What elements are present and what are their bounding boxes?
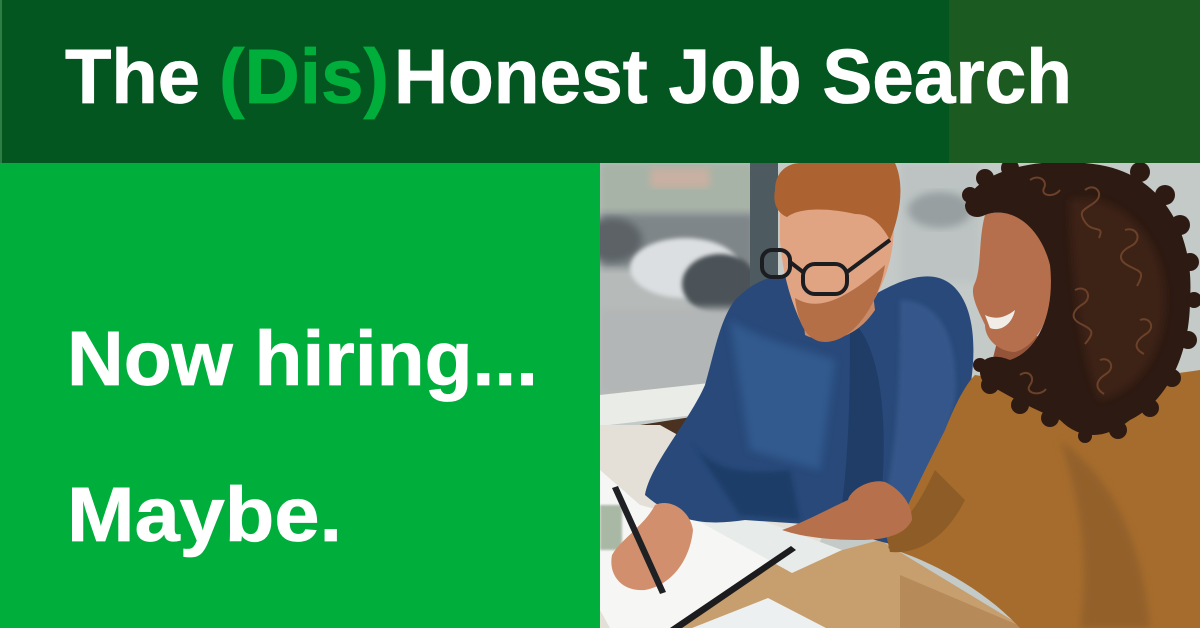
woman's neck [993,336,1038,360]
man's neck [804,300,875,338]
title banner [0,0,1200,163]
headline: Maybe.: Maybe. [67,472,342,558]
photo: man in blue shirt [611,163,973,594]
title words: Honest Job Search: Honest Job Search [394,34,1072,120]
title word: The: The [65,34,200,120]
photo background: window and car park [582,163,1200,628]
headline: Now hiring...: Now hiring... [67,316,538,402]
photo: table and paperwork [600,425,1025,628]
banner lighter right block [949,0,1200,163]
banner left edge [0,0,2,163]
man's face [780,210,894,327]
woman's curly hair [962,159,1200,443]
woman's face [973,212,1052,352]
title [65,34,1072,120]
panel: green message panel [0,163,600,628]
man's hand holding pen [611,503,693,590]
photo: two colleagues reviewing paperwork [582,159,1200,628]
woman's hand [782,481,912,540]
photo: woman in mustard sweater [782,159,1200,628]
title word: (Dis): (Dis) [219,34,389,120]
man's hair [774,163,900,240]
man's glasses [762,240,890,294]
banner dark green background [2,0,949,163]
